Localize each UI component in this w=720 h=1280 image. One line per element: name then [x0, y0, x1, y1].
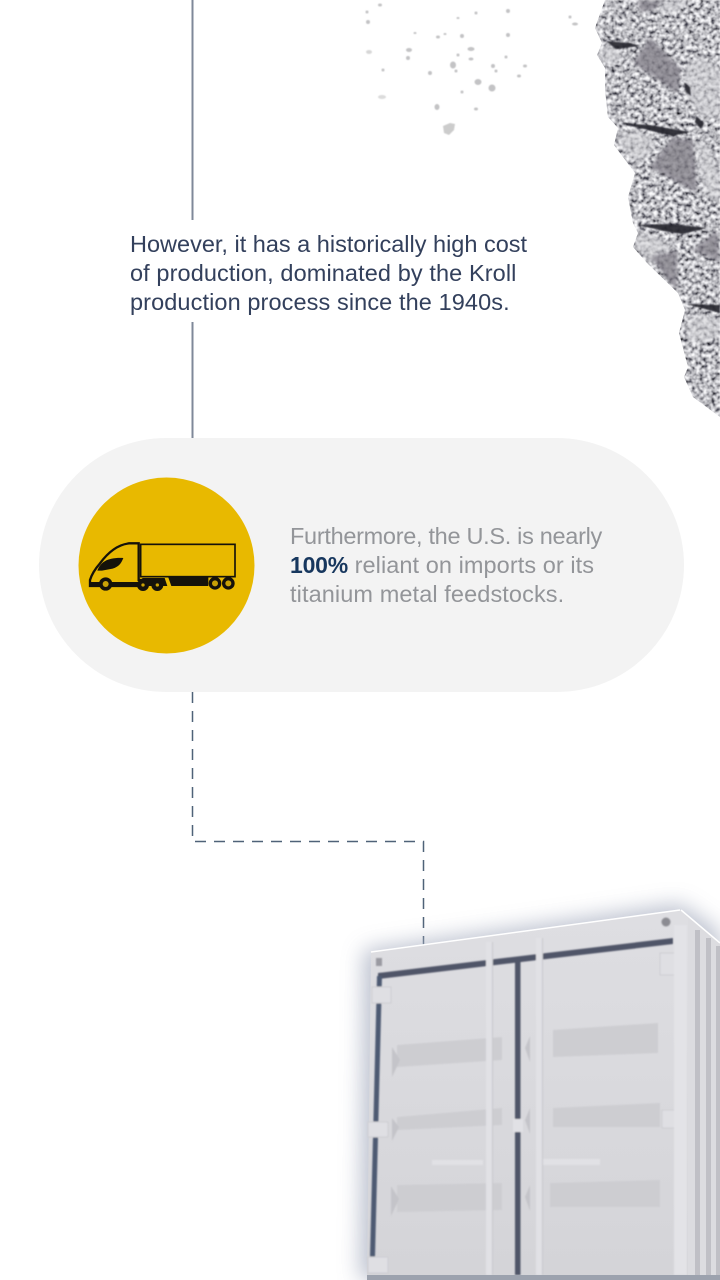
panel: import reliance	[39, 438, 684, 692]
door hinges	[368, 953, 682, 1273]
text block: Kroll production cost: However, it has a historically high cost	[130, 231, 527, 257]
dark crevices	[606, 41, 720, 313]
corner posts	[674, 925, 687, 1275]
grey pyramid facets	[633, 0, 720, 290]
container glow	[360, 904, 720, 1280]
connector line: solid vertical	[192, 0, 194, 438]
locking rods	[432, 938, 600, 1275]
text block: import reliance statistic: titanium metal feedstocks.	[290, 581, 564, 607]
text block: import reliance statistic: 100% reliant on imports or its	[290, 552, 594, 578]
text block: import reliance statistic: Furthermore, the U.S. is nearly	[290, 523, 602, 549]
metal debris particles	[365, 3, 578, 136]
text block: Kroll production cost: of production, dominated by the Kroll	[130, 260, 516, 286]
light lumps	[600, 0, 720, 344]
text block: import reliance statistic	[290, 523, 602, 607]
titanium rock pile	[595, 0, 720, 417]
centre door seal	[515, 962, 520, 1275]
door panels	[391, 1023, 660, 1216]
container base band	[367, 1275, 720, 1280]
text block: Kroll production cost	[130, 230, 550, 317]
connector line: dashed elbow to container	[192, 692, 424, 944]
icon: electric semi truck on yellow circle	[78, 478, 254, 654]
left door seal	[370, 976, 382, 1257]
container side wall	[681, 910, 720, 1275]
top header band	[378, 938, 673, 979]
container front face	[367, 910, 689, 1275]
text block: Kroll production cost: production process since the 1940s.	[130, 289, 510, 315]
